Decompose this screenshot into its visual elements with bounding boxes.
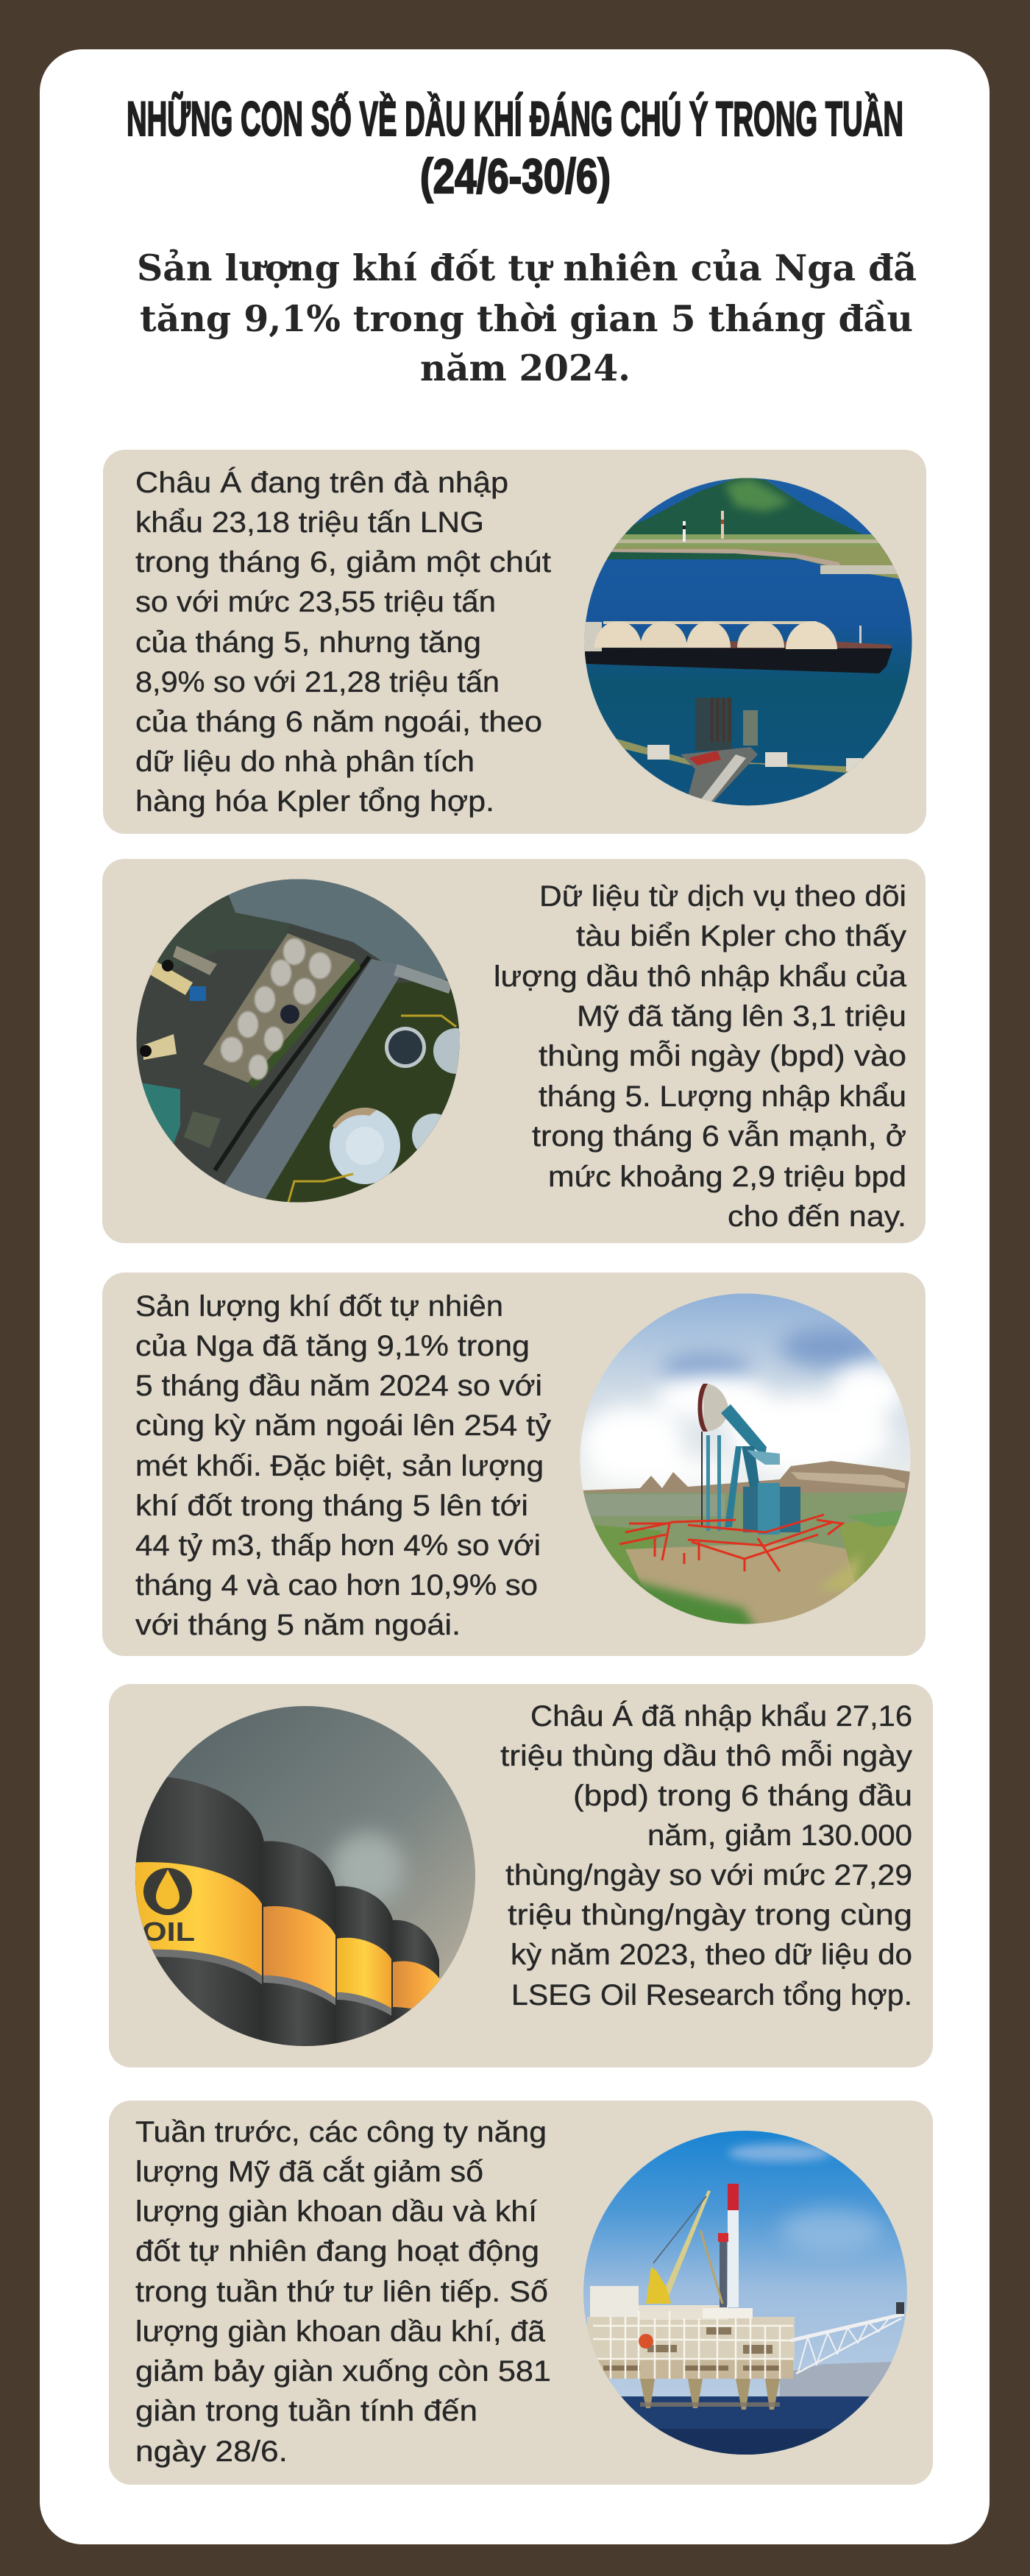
photo: LNG tanker at terminal <box>581 475 916 810</box>
text block 2: trong tháng 6 vẫn mạnh, ở <box>532 1119 906 1153</box>
text block 3: Sản lượng khí đốt tự nhiên <box>135 1290 503 1323</box>
card background 2 <box>102 859 926 1243</box>
text block 5: lượng giàn khoan dầu và khí <box>135 2195 537 2228</box>
text block 3: tháng 4 và cao hơn 10,9% so <box>135 1569 538 1602</box>
text block 3: với tháng 5 năm ngoái. <box>135 1609 461 1641</box>
photo: offshore oil platform <box>578 2127 912 2459</box>
panel: US crude imports <box>102 859 926 1243</box>
red railing <box>619 1515 842 1571</box>
text block 1: của tháng 5, nhưng tăng <box>135 626 481 659</box>
text block 5: lượng Mỹ đã cắt giảm số <box>135 2155 483 2188</box>
text block 3 <box>135 1290 551 1641</box>
text block 3: 44 tỷ m3, thấp hơn 4% so với <box>135 1529 541 1562</box>
text block 3: của Nga đã tăng 9,1% trong <box>135 1330 530 1362</box>
photo: refinery aerial view <box>132 876 479 1207</box>
text block 5: ngày 28/6. <box>135 2435 288 2468</box>
text block 3: mét khối. Đặc biệt, sản lượng <box>135 1450 544 1482</box>
text block 5: đốt tự nhiên đang hoạt động <box>135 2235 539 2268</box>
photo: oil pumpjack in field <box>578 1292 916 1630</box>
card background 4 <box>109 1684 933 2067</box>
text block 2: cho đến nay. <box>728 1200 906 1233</box>
text block 1: dữ liệu do nhà phân tích <box>135 746 475 778</box>
derrick <box>728 2208 739 2307</box>
text block 2: tàu biển Kpler cho thấy <box>576 920 906 952</box>
text block 4: năm, giảm 130.000 <box>647 1819 912 1852</box>
icon: oil drop <box>143 1868 192 1915</box>
flare boom <box>791 2314 904 2374</box>
subtitle: năm 2024. <box>420 347 631 389</box>
text block 1: trong tháng 6, giảm một chút <box>135 546 551 578</box>
panel: LNG imports Asia <box>103 450 926 834</box>
text block 1: của tháng 6 năm ngoái, theo <box>135 706 542 738</box>
oil label: OIL <box>142 1917 195 1947</box>
text block 1 <box>135 466 551 818</box>
title: (24/6-30/6) <box>420 149 611 203</box>
card background 3 <box>102 1273 926 1656</box>
text block 5: lượng giàn khoan dầu khí, đã <box>135 2315 546 2348</box>
text block 4 <box>500 1699 912 2011</box>
text block 5: giảm bảy giàn xuống còn 581 <box>135 2355 551 2388</box>
text block 4: Châu Á đã nhập khẩu 27,16 <box>530 1699 912 1733</box>
text block 1: so với mức 23,55 triệu tấn <box>135 586 496 618</box>
panel: Russian gas output <box>102 1273 926 1656</box>
text block 2: Dữ liệu từ dịch vụ theo dõi <box>539 880 906 913</box>
text block 4: (bpd) trong 6 tháng đầu <box>573 1780 912 1812</box>
pumpjack <box>697 1384 800 1535</box>
text block 2: mức khoảng 2,9 triệu bpd <box>548 1161 906 1193</box>
crane <box>666 2190 711 2296</box>
text block 1: khẩu 23,18 triệu tấn LNG <box>135 506 484 539</box>
card background 5 <box>109 2101 933 2485</box>
ship <box>585 648 892 673</box>
text block 4: LSEG Oil Research tổng hợp. <box>511 1979 912 2011</box>
photo: oil barrels under grey sky <box>129 1704 478 2053</box>
text block 2: Mỹ đã tăng lên 3,1 triệu <box>577 1000 906 1033</box>
text block 1: hàng hóa Kpler tổng hợp. <box>135 785 494 818</box>
terminal <box>617 739 854 773</box>
text block 5 <box>135 2116 551 2468</box>
text block 2 <box>494 880 907 1233</box>
text block 3: 5 tháng đầu năm 2024 so với <box>135 1370 542 1402</box>
text block 3: cùng kỳ năm ngoái lên 254 tỷ <box>135 1409 551 1442</box>
text block 4: thùng/ngày so với mức 27,29 <box>505 1859 912 1892</box>
text block 2: tháng 5. Lượng nhập khẩu <box>539 1080 906 1113</box>
text block 1: Châu Á đang trên đà nhập <box>135 466 508 499</box>
text block 4: kỳ năm 2023, theo dữ liệu do <box>511 1939 912 1971</box>
text block 1: 8,9% so với 21,28 triệu tấn <box>135 666 500 698</box>
card background 1 <box>103 450 926 834</box>
text block 5: trong tuần thứ tư liên tiếp. Số <box>135 2276 548 2308</box>
text block 2: thùng mỗi ngày (bpd) vào <box>539 1039 906 1072</box>
subtitle: Sản lượng khí đốt tự nhiên của Nga đã <box>137 247 917 289</box>
text block 4: triệu thùng/ngày trong cùng <box>508 1899 912 1931</box>
text block 5: Tuần trước, các công ty năng <box>135 2116 547 2148</box>
text block 2: lượng dầu thô nhập khẩu của <box>494 960 907 993</box>
text block 3: khí đốt trong tháng 5 lên tới <box>135 1490 528 1522</box>
panel: Asian crude imports <box>109 1684 933 2067</box>
platform <box>586 2184 904 2410</box>
text block 4: triệu thùng dầu thô mỗi ngày <box>500 1739 912 1772</box>
panel: US rig count <box>109 2101 933 2485</box>
text block 5: giàn trong tuần tính đến <box>135 2395 477 2427</box>
subtitle: tăng 9,1% trong thời gian 5 tháng đầu <box>140 297 913 340</box>
title <box>127 91 903 203</box>
subtitle <box>137 247 917 389</box>
